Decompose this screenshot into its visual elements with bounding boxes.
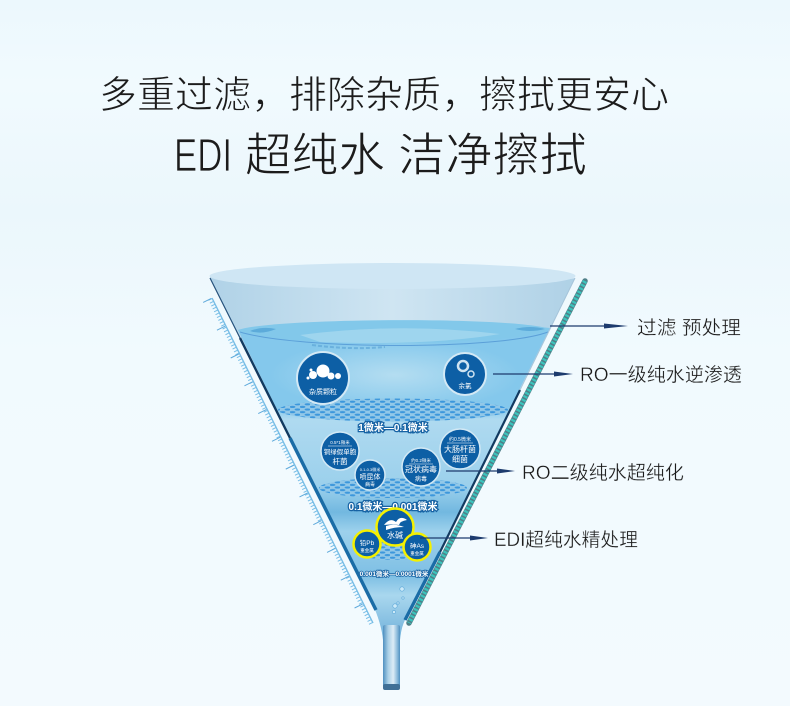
- icon: lead heavy metal: [354, 530, 380, 558]
- title: subheading: 洁净擦拭: [398, 129, 587, 181]
- water glow: [270, 339, 520, 411]
- icon: residual chlorine: 余氯: [458, 381, 472, 390]
- icon: arsenic heavy metal: [404, 534, 430, 560]
- filter layer 2: [319, 478, 467, 498]
- callout: pre-filtration: [550, 317, 741, 339]
- title: subheading: [174, 129, 587, 181]
- water surface: [238, 320, 550, 343]
- icon: pseudomonas: 铜绿假单胞: [324, 447, 357, 456]
- callout: RO stage two: RO二级纯水超纯化: [522, 462, 684, 484]
- title: subheading: 超纯水: [245, 129, 385, 181]
- icon: pseudomonas: 0.5*1微米: [330, 439, 350, 446]
- callout: EDI polishing: EDI超纯水精处理: [494, 529, 638, 551]
- callout: RO stage one: [493, 364, 742, 386]
- callout: pre-filtration: 过滤 预处理: [637, 317, 741, 339]
- icon: arsenic heavy metal: 砷As: [410, 541, 425, 550]
- icon: impurity particles: [297, 352, 349, 404]
- funnel glass body: [210, 277, 575, 640]
- icon: mycoplasma: 喷昆体: [360, 472, 380, 481]
- filter layer 3: [358, 542, 426, 560]
- funnel graphic: [210, 263, 576, 690]
- funnel left dark edge: [210, 278, 240, 338]
- icon: lead heavy metal: 铅Pb: [360, 538, 375, 547]
- icon: residual chlorine: [444, 353, 486, 395]
- icon: impurity particles: 杂质颗粒: [309, 387, 337, 396]
- icon: coronavirus: 病毒: [415, 475, 427, 483]
- title: main heading: 多重过滤，排除杂质，擦拭更安心: [99, 75, 669, 117]
- icon: mycoplasma: 病毒: [365, 481, 375, 488]
- title: subheading: EDI: [174, 129, 232, 181]
- callout: EDI polishing: [420, 529, 638, 551]
- label: 0.001 to 0.0001 micron: 0.001微米—0.0001微米: [360, 569, 429, 578]
- icon: e. coli: 约0.5微米: [449, 436, 471, 443]
- icon: mycoplasma: 0.1-0.3微米: [360, 466, 380, 472]
- icon: coronavirus: 约0.2微米: [411, 457, 431, 464]
- left measuring ruler: [207, 298, 373, 625]
- bubbles: [392, 587, 404, 614]
- right teal rope scale: [409, 281, 585, 623]
- label: 0.1 to 0.001 micron: 0.1微米—0.001微米: [349, 500, 437, 513]
- funnel rim ellipse: [210, 263, 576, 289]
- filter layer 1: [278, 398, 508, 422]
- icon: e. coli: 大肠杆菌: [444, 444, 476, 454]
- outlet tube: [383, 625, 400, 688]
- icon: pseudomonas: [321, 432, 359, 470]
- callout: RO stage two: [446, 462, 684, 484]
- icon: e. coli: [440, 429, 480, 469]
- icon: water alkali: [376, 508, 414, 546]
- icon: coronavirus: 冠状病毒: [405, 464, 437, 474]
- icon: e. coli: 细菌: [452, 454, 468, 464]
- callout: RO stage one: RO一级纯水逆渗透: [580, 364, 742, 386]
- icon: arsenic heavy metal: 重金属: [410, 550, 424, 557]
- funnel water: [238, 320, 550, 640]
- funnel right dark edge: [440, 390, 520, 552]
- icon: mycoplasma: [355, 460, 385, 490]
- icon: coronavirus: [402, 448, 440, 486]
- icon: pseudomonas: 杆菌: [332, 456, 348, 466]
- icon: water alkali: 水碱: [387, 530, 403, 540]
- label: 1 to 0.1 micron: 1微米—0.1微米: [358, 421, 428, 434]
- icon: lead heavy metal: 重金属: [360, 547, 374, 554]
